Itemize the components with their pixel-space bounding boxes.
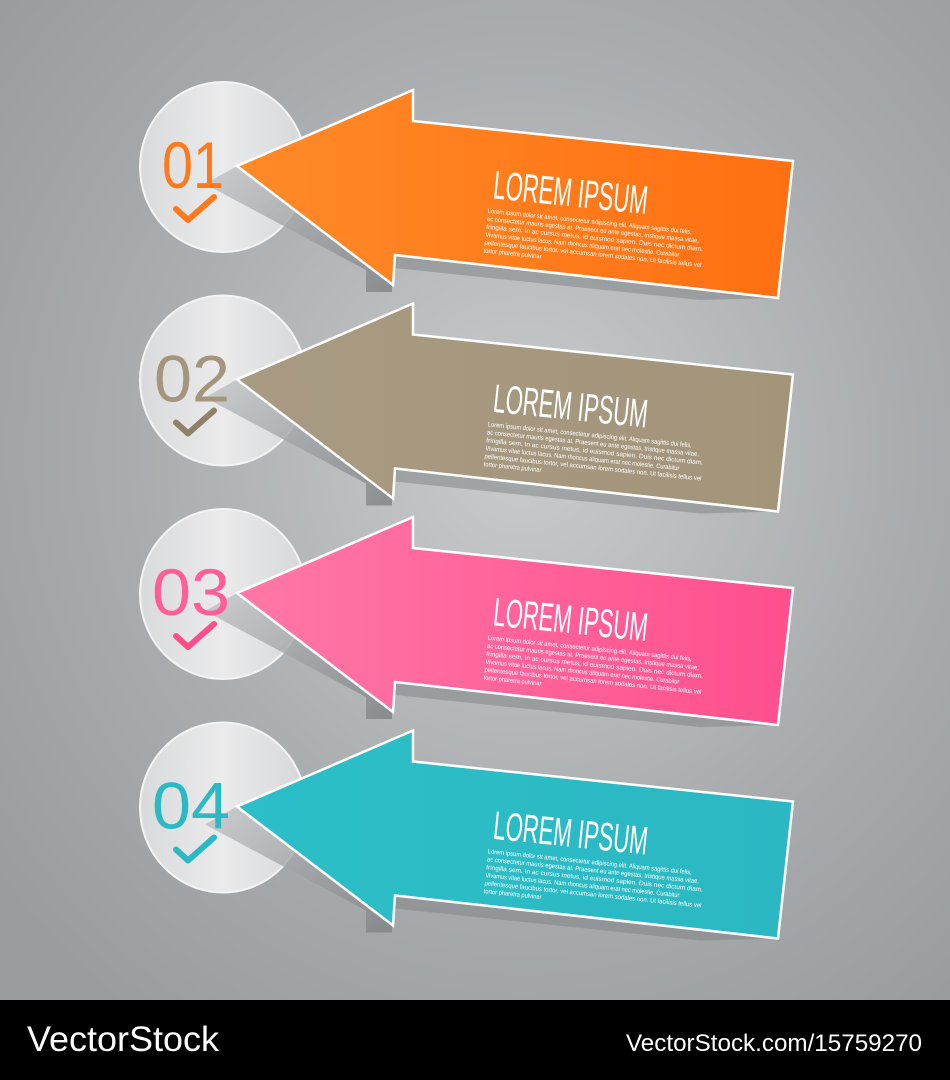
text 2: pellentesque faucibus tortor, vel accumsan lorem sodales non. Ut facilisis tellus vel xyxy=(484,453,702,483)
check 4 xyxy=(176,838,214,860)
shadow 4 xyxy=(205,806,392,932)
text 2 xyxy=(483,377,710,491)
text 1: pellentesque faucibus tortor, vel accumsan lorem sodales non. Ut facilisis tellus vel xyxy=(484,240,702,269)
step 3 xyxy=(140,509,793,727)
text 1: fringilla sem. In ac cursus metus, id euismod sapien. Duis nec dictum diam. xyxy=(486,224,704,253)
arrow 4 xyxy=(237,730,793,938)
text 1 xyxy=(483,163,710,277)
text 4: ac consectetur mauris egestas at. Praesent eu ante egestas, tristique massa vitae, xyxy=(487,856,699,885)
text 3: fringilla sem. In ac cursus metus, id euismod sapien. Duis nec dictum diam. xyxy=(486,651,704,680)
text 3: Lorem ipsum dolor sit amet, consectetur adipiscing elit. Aliquam sagittis dui felis, xyxy=(487,635,692,663)
text 4: Vivamus vitae luctus lacus. Nam rhoncus aliquam erat nec molestie. Curabitur xyxy=(485,872,680,899)
text 2: LOREM IPSUM xyxy=(491,377,650,437)
check 1 xyxy=(176,197,214,220)
arrow 3 xyxy=(237,517,793,725)
circle 2 xyxy=(140,296,306,466)
text 2: fringilla sem. In ac cursus metus, id euismod sapien. Duis nec dictum diam. xyxy=(486,437,704,467)
number 1: 01 xyxy=(162,128,224,202)
text 3: pellentesque faucibus tortor, vel accumsan lorem sodales non. Ut facilisis tellus vel xyxy=(484,667,702,696)
text 1: Lorem ipsum dolor sit amet, consectetur adipiscing elit. Aliquam sagittis dui felis, xyxy=(487,208,692,236)
number 2: 02 xyxy=(154,342,230,416)
step 2 xyxy=(140,296,793,514)
circle 1 xyxy=(140,82,306,252)
shadow 3 xyxy=(205,593,392,719)
arrow 2 xyxy=(237,304,793,512)
footer url: VectorStock.com/15759270 xyxy=(626,1030,922,1057)
text 4 xyxy=(483,804,710,918)
footer bar xyxy=(0,1000,950,1080)
text 3 xyxy=(483,590,710,704)
number 3: 03 xyxy=(152,555,230,629)
text 1: LOREM IPSUM xyxy=(491,163,650,223)
text 4: Lorem ipsum dolor sit amet, consectetur adipiscing elit. Aliquam sagittis dui felis, xyxy=(487,848,692,876)
text 2: Lorem ipsum dolor sit amet, consectetur adipiscing elit. Aliquam sagittis dui felis, xyxy=(487,421,692,449)
text 4: LOREM IPSUM xyxy=(491,804,650,864)
text 3: ac consectetur mauris egestas at. Praesent eu ante egestas, tristique massa vitae, xyxy=(487,643,699,672)
footer logo: VectorStock xyxy=(27,1020,220,1059)
text 2: Vivamus vitae luctus lacus. Nam rhoncus aliquam erat nec molestie. Curabitur xyxy=(485,445,680,472)
step 1 xyxy=(140,82,793,300)
shadow 2 xyxy=(205,380,392,506)
shadow 1 xyxy=(205,166,392,292)
text 4: tortor pharetra pulvinar xyxy=(483,888,542,901)
text 1: ac consectetur mauris egestas at. Praesent eu ante egestas, tristique massa vitae, xyxy=(487,216,699,245)
number 4: 04 xyxy=(152,768,230,842)
text 3: Vivamus vitae luctus lacus. Nam rhoncus aliquam erat nec molestie. Curabitur xyxy=(485,659,680,686)
circle 4 xyxy=(140,722,306,892)
text 4: pellentesque faucibus tortor, vel accumsan lorem sodales non. Ut facilisis tellus vel xyxy=(484,880,702,910)
circle 3 xyxy=(140,509,306,679)
step 4 xyxy=(140,722,793,940)
arrow 1 xyxy=(237,90,793,298)
text 3: LOREM IPSUM xyxy=(491,590,650,650)
check 2 xyxy=(176,410,214,434)
text 2: ac consectetur mauris egestas at. Praesent eu ante egestas, tristique massa vitae, xyxy=(487,429,699,458)
text 4: fringilla sem. In ac cursus metus, id euismod sapien. Duis nec dictum diam. xyxy=(486,864,704,894)
check 3 xyxy=(176,624,214,647)
text 2: tortor pharetra pulvinar xyxy=(483,461,542,474)
text 3: tortor pharetra pulvinar xyxy=(483,675,542,688)
text 1: Vivamus vitae luctus lacus. Nam rhoncus aliquam erat nec molestie. Curabitur xyxy=(485,232,680,259)
text 1: tortor pharetra pulvinar xyxy=(483,248,542,261)
